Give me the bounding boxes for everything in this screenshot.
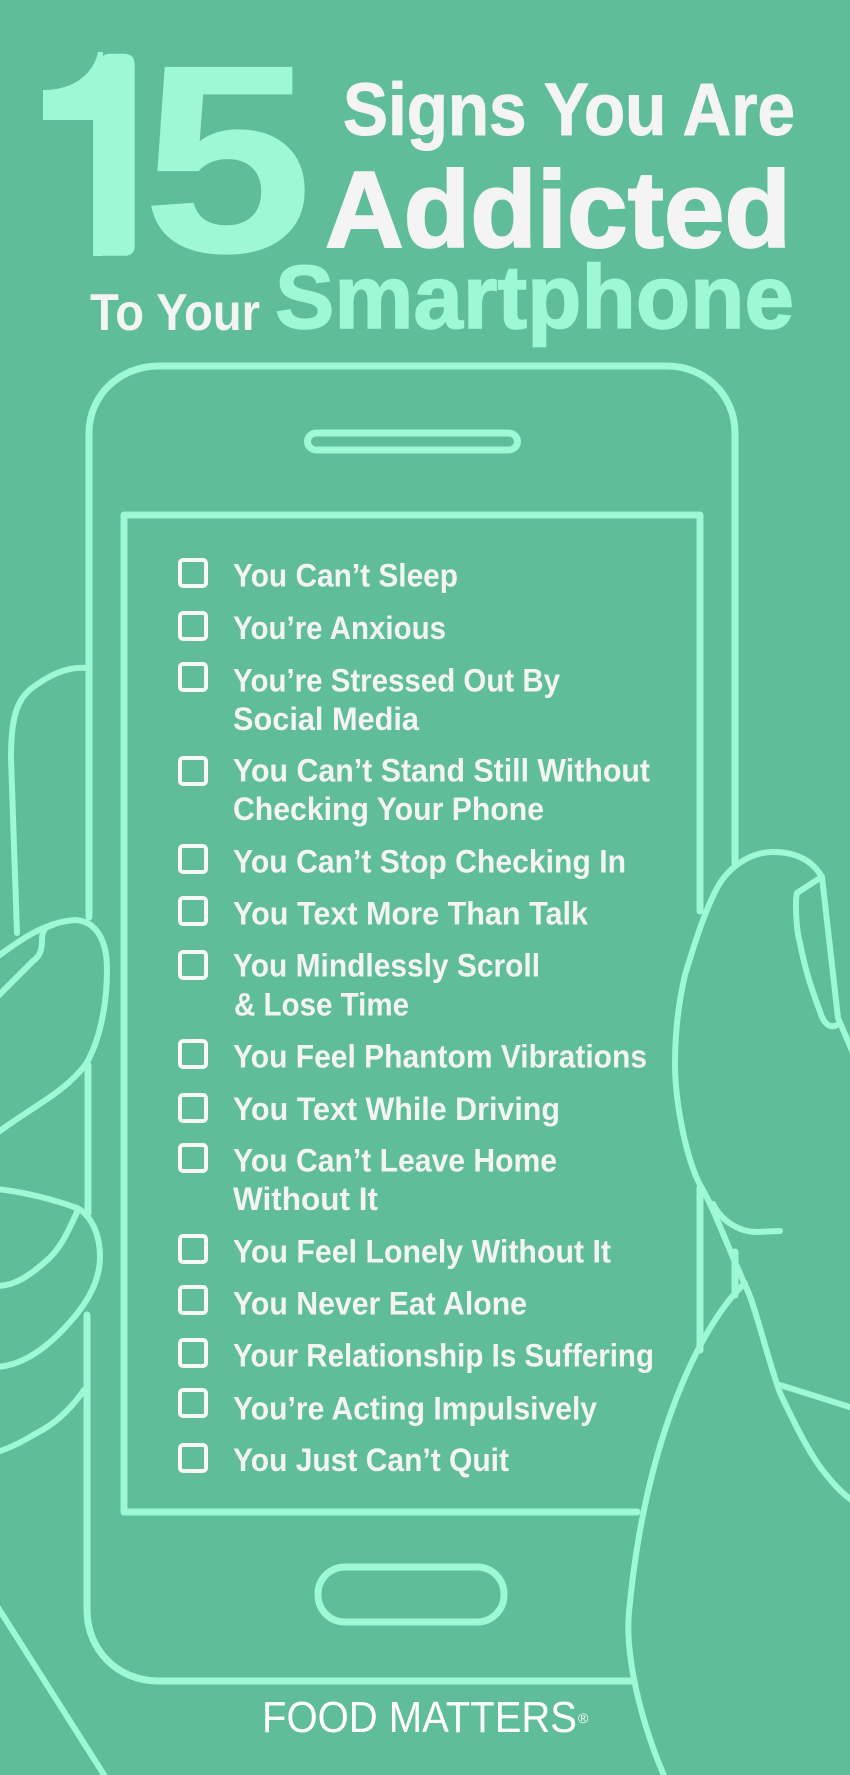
item: You Text While Driving: You Text While Driving <box>233 1091 560 1127</box>
title <box>43 52 794 348</box>
item: You're Acting Impulsively: You’re Acting Impulsively <box>233 1390 597 1426</box>
thumb nail <box>796 878 837 1026</box>
home button <box>318 1567 504 1622</box>
heading line: Smartphone: Smartphone <box>275 248 794 348</box>
phone right edge lower segment <box>732 1252 738 1295</box>
item: You Text More Than Talk: You Text More Than Talk <box>233 896 588 932</box>
thumb <box>0 920 107 1133</box>
big number 15: 1 <box>34 40 186 287</box>
item: Your Relationship Is Suffering: Your Relationship Is Suffering <box>233 1338 654 1374</box>
heading line: Signs You Are: Signs You Are <box>343 68 795 151</box>
back finger <box>11 668 88 933</box>
item: You're Stressed Out By Social Media: Social Media <box>233 701 419 737</box>
item: You Can't Stand Still Without Checking Your Phone <box>180 753 650 827</box>
item: You Feel Phantom Vibrations: You Feel Phantom Vibrations <box>233 1039 647 1075</box>
item: You Can't Stop Checking In: You Can’t Stop Checking In <box>233 843 626 879</box>
phone body <box>87 366 735 1681</box>
thumb crease <box>713 1204 780 1232</box>
wrist <box>0 1606 106 1775</box>
big number 15 <box>43 52 305 256</box>
item: You Mindlessly Scroll & Lose Time: & Lose Time <box>234 987 409 1023</box>
item: You Feel Lonely Without It: You Feel Lonely Without It <box>233 1233 611 1269</box>
heading line: To Your: To Your <box>90 284 260 342</box>
palm line <box>780 1385 850 1408</box>
item: You're Stressed Out By Social Media: You’re Stressed Out By <box>233 663 560 699</box>
phone outline <box>87 366 735 1681</box>
item: You Never Eat Alone: You Never Eat Alone <box>233 1285 527 1321</box>
second finger <box>0 1189 100 1367</box>
phone screen <box>124 515 700 1512</box>
logo: FOOD MATTERS: ® <box>578 1710 589 1726</box>
item: You're Stressed Out By Social Media <box>180 663 560 737</box>
item: You Can't Sleep: You Can’t Sleep <box>233 558 458 594</box>
item: You're Anxious: You’re Anxious <box>233 610 446 646</box>
third finger <box>0 1390 84 1452</box>
thumb nail <box>0 925 53 997</box>
item: You Mindlessly Scroll & Lose Time: You Mindlessly Scroll <box>233 948 540 984</box>
checklist <box>180 558 654 1478</box>
item: You Can't Leave Home Without It <box>180 1143 557 1217</box>
thumb edge <box>822 877 850 1053</box>
item: You Just Can't Quit: You Just Can’t Quit <box>233 1442 509 1478</box>
item: You Can't Leave Home Without It: Without It <box>233 1181 378 1217</box>
right hand <box>628 852 850 1775</box>
palm <box>628 1283 745 1775</box>
second finger nail <box>0 1210 78 1286</box>
left hand <box>0 668 107 1775</box>
speaker <box>308 433 518 450</box>
item: You Can't Stand Still Without Checking Your Phone: You Can’t Stand Still Without <box>233 753 650 789</box>
thumb <box>675 852 850 1501</box>
logo: FOOD MATTERS: FOOD MATTERS <box>262 1693 577 1742</box>
item: You Can't Stand Still Without Checking Your Phone: Checking Your Phone <box>233 791 544 827</box>
item: You Mindlessly Scroll & Lose Time <box>180 948 540 1023</box>
heading line: Addicted: Addicted <box>325 149 791 271</box>
big number 15: 5 <box>142 9 313 310</box>
item: You Can't Leave Home Without It: You Can’t Leave Home <box>233 1143 557 1179</box>
